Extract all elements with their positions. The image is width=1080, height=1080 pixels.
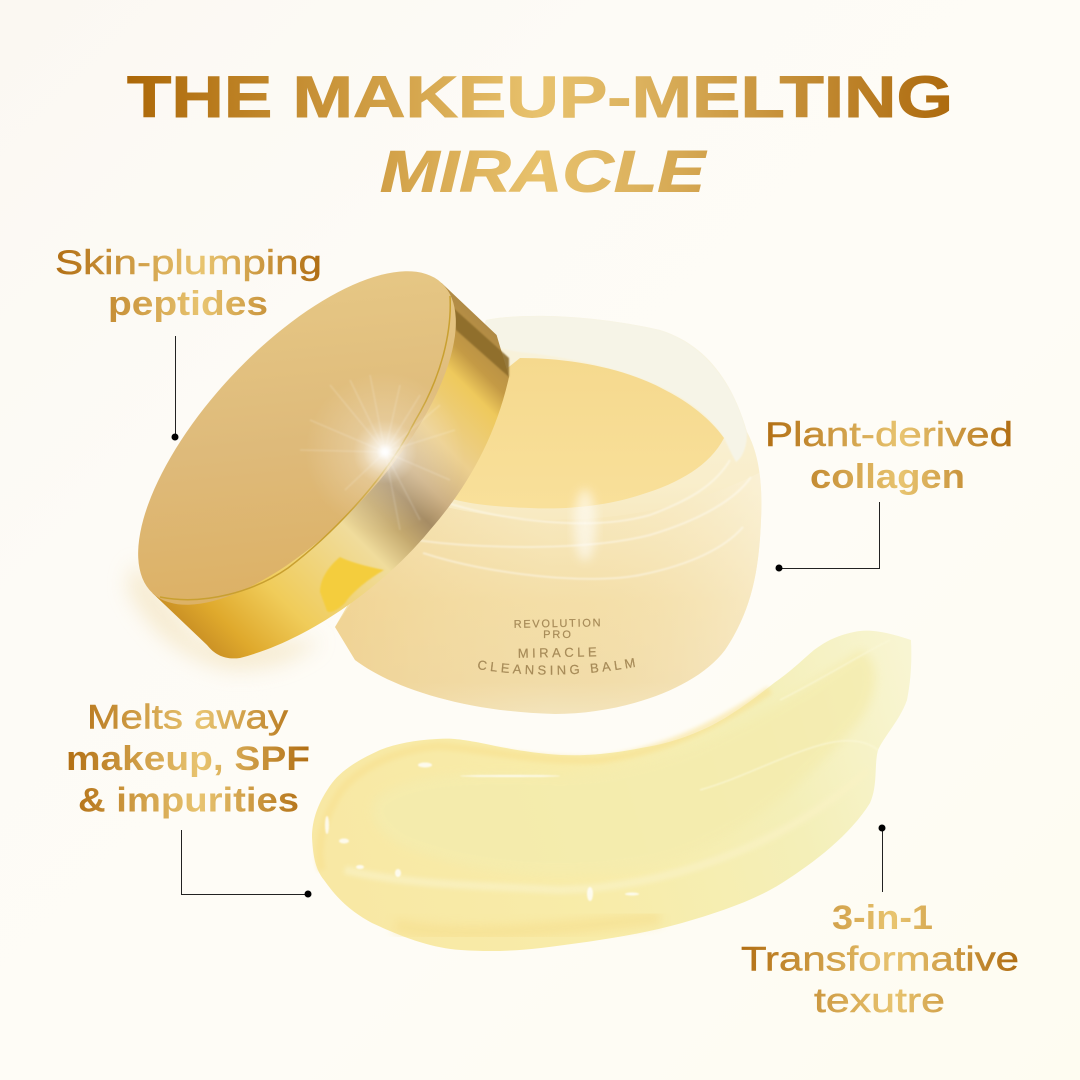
swatch lower fold xyxy=(345,770,868,890)
jar label: CLEANSING BALM xyxy=(478,658,635,675)
title xyxy=(127,65,953,204)
jar label xyxy=(478,617,635,675)
balm surface in jar xyxy=(452,358,724,508)
callout: melts away makeup xyxy=(66,698,312,898)
product: jar and lid xyxy=(122,271,770,756)
jar side tint xyxy=(335,480,761,710)
swatch base xyxy=(312,631,911,951)
callout: plant-derived collagen: Plant-derived xyxy=(765,416,1013,454)
swatch highlights xyxy=(325,762,639,901)
jar thread ridges xyxy=(415,460,751,579)
callout: 3-in-1 texture: 3-in-1 xyxy=(832,899,933,937)
callout: plant-derived collagen: collagen xyxy=(810,458,965,496)
balm on lid xyxy=(320,557,384,612)
jar label: PRO xyxy=(543,629,573,641)
balm swatch xyxy=(312,631,911,951)
lid rim highlight xyxy=(160,296,450,600)
swatch trough xyxy=(372,650,875,874)
callout: 3-in-1 texture xyxy=(741,824,1019,1020)
jar label: REVOLUTION xyxy=(514,617,602,631)
title: THE MAKEUP-MELTING xyxy=(127,65,953,130)
callout: 3-in-1 texture: texutre xyxy=(814,982,945,1020)
lid side band xyxy=(152,283,509,658)
callout: melts away makeup: makeup, SPF xyxy=(66,740,310,778)
callout: melts away makeup: Melts away xyxy=(87,698,288,736)
callout: melts away makeup: & impurities xyxy=(78,782,299,820)
callout: skin-plumping peptides: peptides xyxy=(108,285,268,323)
lid top face xyxy=(87,222,507,654)
swatch streaks xyxy=(700,640,890,790)
callout: plant-derived collagen xyxy=(765,416,1013,572)
lid dark reflection xyxy=(450,305,509,377)
callout: skin-plumping peptides: Skin-plumping xyxy=(55,244,322,282)
jar label: MIRACLE xyxy=(518,644,600,661)
title: MIRACLE xyxy=(380,140,708,204)
jar body xyxy=(335,316,761,714)
lid cast shadow xyxy=(128,565,320,670)
callout: skin-plumping peptides xyxy=(55,244,322,440)
jar glare xyxy=(574,489,596,561)
lid sparkle xyxy=(300,372,465,532)
callout: 3-in-1 texture: Transformative xyxy=(741,940,1019,978)
swatch rim xyxy=(320,690,770,870)
jar rim xyxy=(480,316,747,462)
